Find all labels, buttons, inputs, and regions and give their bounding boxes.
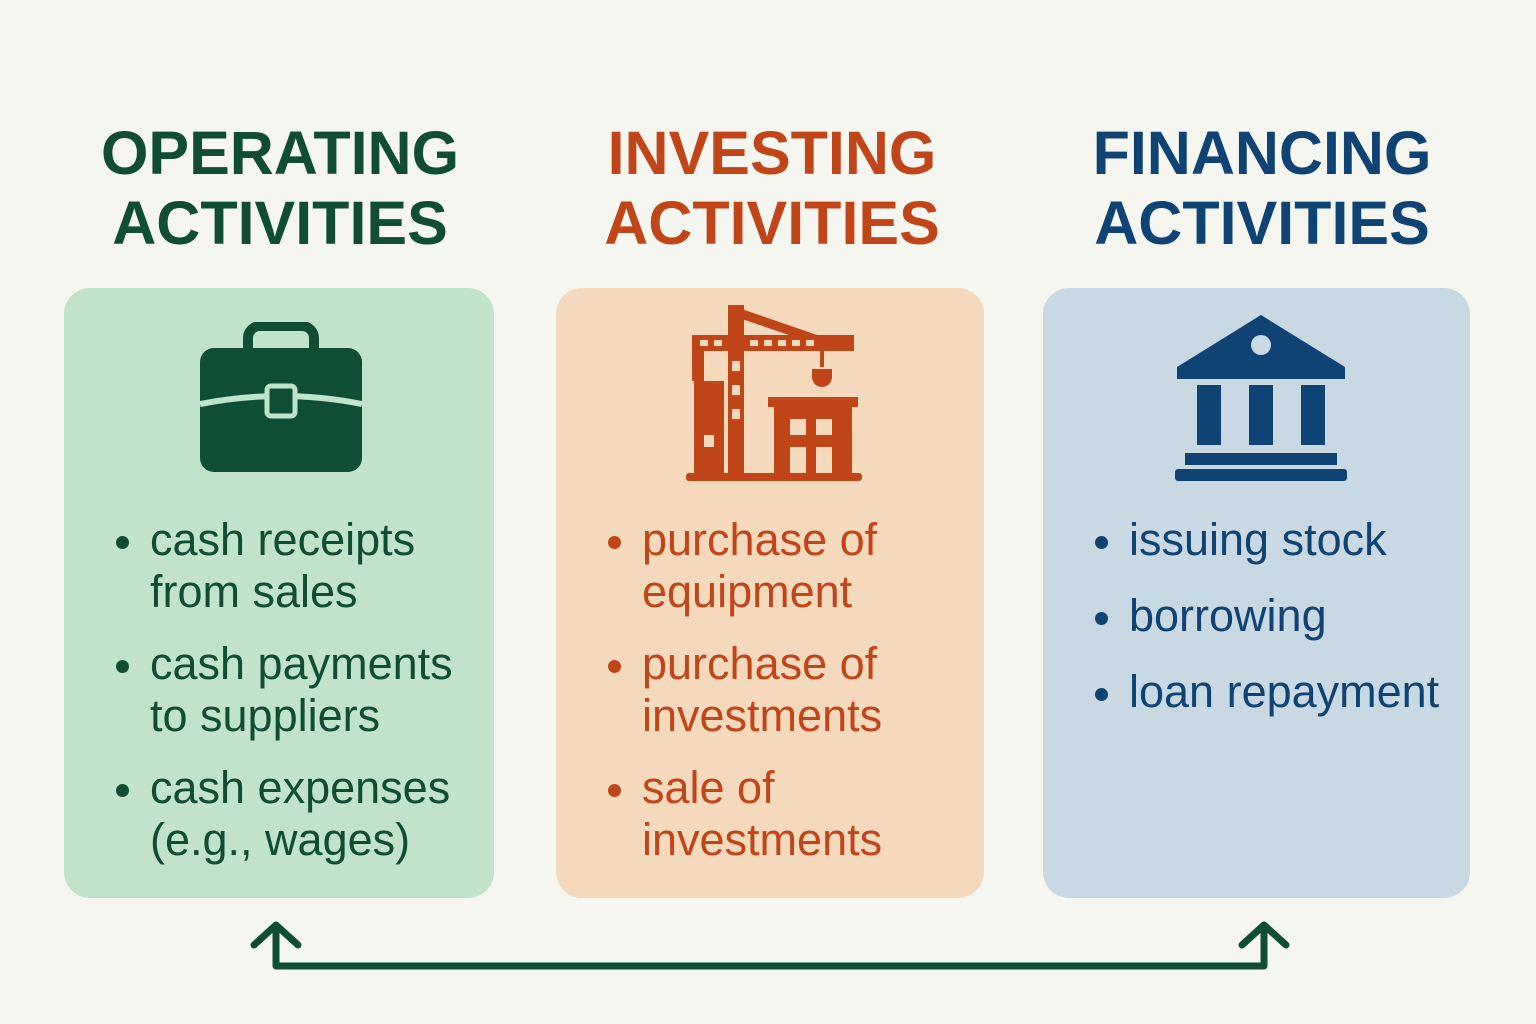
list: financing items	[1095, 514, 1439, 717]
title: financing: FINANCING	[1093, 119, 1431, 187]
icon: crane and building	[686, 305, 862, 481]
arrow: cash flow connector	[250, 922, 1290, 970]
list: operating items: to suppliers	[150, 690, 380, 741]
list: operating items: (e.g., wages)	[150, 814, 410, 865]
list: investing items: investments	[642, 690, 882, 741]
icon: briefcase	[200, 322, 362, 472]
panel: investing	[556, 288, 984, 898]
title: investing: ACTIVITIES	[604, 189, 940, 257]
title: operating: ACTIVITIES	[112, 189, 448, 257]
list: operating items	[116, 514, 453, 865]
title: investing: INVESTING	[608, 119, 936, 187]
title: investing	[604, 119, 940, 257]
list: financing items: issuing stock	[1129, 514, 1387, 565]
list: investing items: equipment	[642, 566, 852, 617]
panel: operating	[64, 288, 494, 898]
list: operating items: cash expenses	[150, 762, 450, 813]
list: investing items: purchase of	[642, 514, 877, 565]
list: investing items: investments	[642, 814, 882, 865]
icon: bank	[1175, 315, 1347, 481]
title: financing: ACTIVITIES	[1094, 189, 1430, 257]
list: financing items: borrowing	[1129, 590, 1327, 641]
list: operating items: from sales	[150, 566, 358, 617]
title: operating: OPERATING	[101, 119, 459, 187]
title: financing	[1093, 119, 1431, 257]
list: investing items: purchase of	[642, 638, 877, 689]
list: investing items: sale of	[642, 762, 775, 813]
panel: financing	[1043, 288, 1470, 898]
list: investing items	[608, 514, 882, 865]
list: operating items: cash payments	[150, 638, 453, 689]
title: operating	[101, 119, 459, 257]
list: operating items: cash receipts	[150, 514, 415, 565]
list: financing items: loan repayment	[1129, 666, 1439, 717]
